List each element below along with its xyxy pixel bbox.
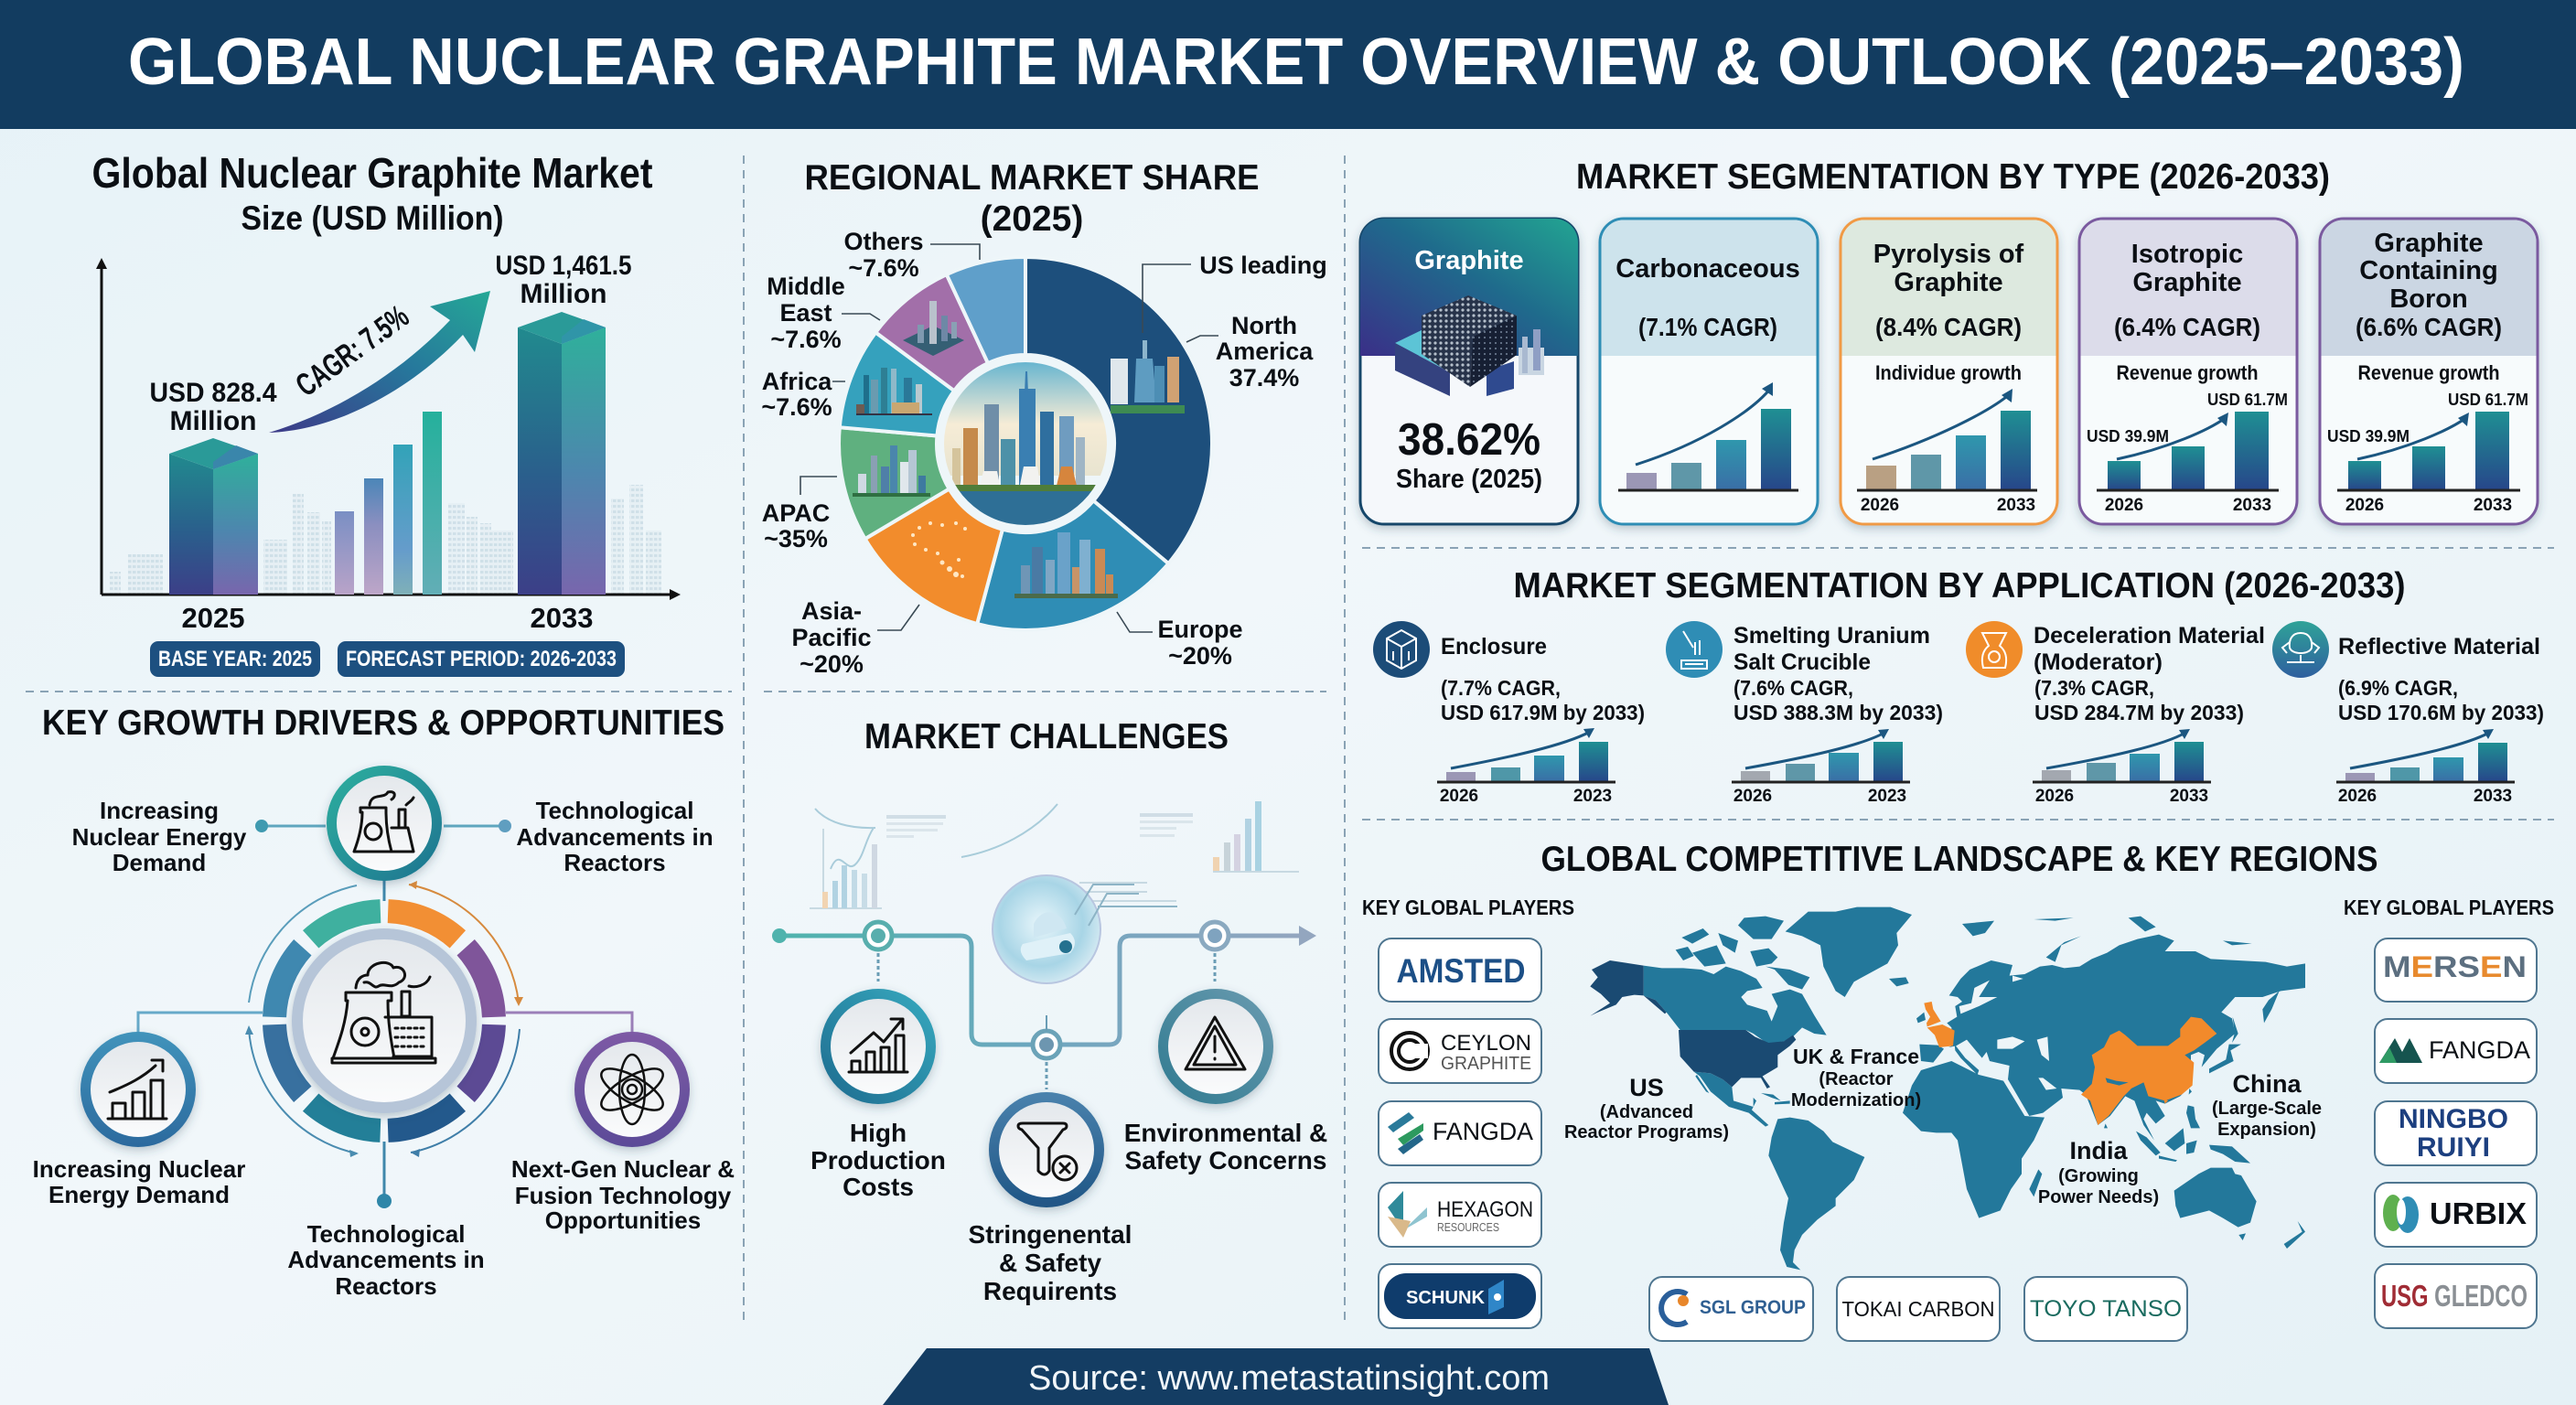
logo: Fangda left	[1379, 1101, 1541, 1165]
card: Graphite Containing Boron: USD 61.7M	[2448, 391, 2528, 409]
card: Graphite Containing Boron: USD 39.9M	[2327, 427, 2410, 445]
label: stringent requirements: Stringenental	[969, 1220, 1132, 1249]
label: bottom driver: Reactors	[335, 1272, 437, 1300]
label Asia-Pacific: ~20%	[800, 650, 864, 678]
item: Enclosure: Enclosure	[1441, 634, 1547, 660]
heading: by type: MARKET SEGMENTATION BY TYPE (2026-2033)	[1576, 157, 2330, 197]
label: bottom driver: Technological	[307, 1220, 465, 1248]
card: Graphite Containing Boron: Graphite	[2374, 229, 2484, 258]
label: high production costs: High	[850, 1119, 907, 1147]
logo: SGL Group: SGL GROUP	[1700, 1297, 1806, 1318]
card: Isotropic Graphite: 2033	[2233, 496, 2271, 515]
item: Smelting Uranium Salt Crucible: Salt Crucible	[1733, 649, 1871, 675]
label Middle East: East	[779, 299, 832, 327]
label: top-right driver: Advancements in	[516, 823, 714, 851]
label: high production costs: Production	[810, 1146, 946, 1174]
card: Pyrolysis of Graphite	[1841, 219, 2057, 524]
item: Smelting Uranium Salt Crucible: 2023	[1868, 787, 1906, 806]
year 2033: 2033	[531, 602, 593, 634]
subheading: size unit: Size (USD Million)	[242, 199, 503, 237]
challenge medallion: environmental safety	[1158, 989, 1273, 1104]
faint skyline background	[110, 485, 661, 595]
label: top-left driver: Increasing	[100, 797, 219, 824]
card: Graphite Containing Boron: 2026	[2345, 496, 2384, 515]
center reactor medallion	[292, 928, 477, 1113]
panel: key growth drivers	[33, 703, 735, 1300]
item: Deceleration Material	[1966, 621, 2265, 806]
label: top-right driver: Reactors	[564, 849, 666, 876]
item: Enclosure: USD 617.9M by 2033)	[1441, 701, 1645, 724]
center skyline illustration	[944, 362, 1107, 525]
label: high production costs: Costs	[843, 1173, 914, 1201]
source banner	[883, 1348, 1669, 1405]
city in North America slice	[1111, 340, 1185, 413]
city in Middle East slice	[903, 301, 964, 356]
logo: Toyo Tanso: TOYO TANSO	[2030, 1296, 2182, 1322]
value 2033 unit: Million	[521, 279, 606, 309]
card: Graphite: Share (2025)	[1396, 465, 1542, 494]
driver medallion: top	[327, 766, 442, 881]
city in Africa slice	[856, 368, 932, 415]
map label: India: (Growing	[2058, 1166, 2139, 1186]
logo: Fangda right	[2375, 1019, 2537, 1083]
forecast period pill: FORECAST PERIOD: 2026-2033	[346, 647, 617, 671]
label Others: Others	[843, 228, 924, 255]
item: Reflective Material: (6.9% CAGR,	[2338, 676, 2458, 700]
item: Enclosure: 2026	[1440, 787, 1478, 806]
label Middle East: Middle	[767, 273, 845, 300]
label Europe: ~20%	[1168, 642, 1232, 670]
label: top-left driver: Nuclear Energy	[72, 823, 247, 851]
value 2025	[150, 378, 277, 436]
city in Europe slice	[1014, 532, 1118, 598]
logo: Schunk	[1379, 1264, 1541, 1328]
card: Graphite Containing Boron: (6.6% CAGR)	[2356, 313, 2502, 341]
card: Graphite Containing Boron: Containing	[2359, 256, 2498, 285]
label: stringent requirements: & Safety	[999, 1249, 1101, 1277]
card: Isotropic Graphite: USD 61.7M	[2207, 391, 2288, 409]
card: Graphite Containing Boron	[2320, 219, 2538, 524]
logo: SGL Group	[1649, 1277, 1813, 1341]
logo: Mersen	[2375, 938, 2537, 1002]
item: Reflective Material: 2033	[2474, 787, 2512, 806]
label: left driver: Increasing Nuclear	[33, 1155, 245, 1183]
map label: India: India	[2069, 1137, 2128, 1164]
label Africa: ~7.6%	[761, 393, 832, 421]
logo: USG Gledco: USG GLEDCO	[2381, 1279, 2528, 1313]
label Africa: Africa	[762, 368, 832, 395]
label: right opportunity: Next-Gen Nuclear &	[511, 1155, 735, 1183]
challenge medallion: production costs	[821, 989, 936, 1104]
base year pill: BASE YEAR: 2025	[158, 647, 312, 671]
card: Pyrolysis of Graphite: 2033	[1997, 496, 2035, 515]
item: Smelting Uranium Salt Crucible: (7.6% CAGR,	[1733, 676, 1853, 700]
label: left driver: Energy Demand	[48, 1181, 230, 1208]
map label: China: China	[2232, 1070, 2302, 1098]
bar 2025	[169, 438, 258, 595]
item: Smelting Uranium Salt Crucible: USD 388.3M by 2033)	[1733, 701, 1943, 724]
header banner: GLOBAL NUCLEAR GRAPHITE MARKET OVERVIEW & OUTLOOK (2025–2033)	[128, 26, 2464, 99]
heading: challenges: MARKET CHALLENGES	[864, 717, 1229, 756]
label: right opportunity: Opportunities	[545, 1207, 701, 1234]
world map	[1590, 907, 2305, 1270]
label: stringent requirements: Requirents	[983, 1277, 1117, 1305]
item: Reflective Material: 2026	[2338, 787, 2377, 806]
value 2025: Million	[170, 406, 256, 436]
driver medallion: right	[574, 1032, 690, 1147]
city in APAC slice	[853, 445, 930, 497]
item: Deceleration Material: Deceleration Material	[2034, 623, 2265, 649]
logo: Schunk: SCHUNK	[1406, 1288, 1486, 1308]
item: Deceleration Material: 2033	[2170, 787, 2208, 806]
item: Enclosure	[1373, 621, 1645, 806]
donut chart	[839, 257, 1212, 630]
item: Deceleration Material: (7.3% CAGR,	[2034, 676, 2154, 700]
map label: US: (Advanced	[1600, 1102, 1693, 1122]
card: Isotropic Graphite: USD 39.9M	[2087, 427, 2169, 445]
card: Carbonaceous: (7.1% CAGR)	[1638, 313, 1777, 341]
logo: Ceylon Graphite: CEYLON	[1441, 1031, 1531, 1056]
map label: US: US	[1629, 1074, 1664, 1101]
card: Pyrolysis of Graphite: Individue growth	[1875, 361, 2022, 384]
header banner	[0, 0, 2576, 129]
chart axes	[96, 258, 681, 600]
map label: UK and France: (Reactor	[1819, 1069, 1894, 1089]
panel: competitive landscape	[1362, 840, 2554, 1341]
label: bottom driver: Advancements in	[287, 1246, 485, 1273]
map label: China: (Large-Scale	[2212, 1099, 2322, 1119]
card: Isotropic Graphite: 2026	[2105, 496, 2143, 515]
world dots in Asia-Pacific slice	[911, 521, 967, 578]
item: Reflective Material	[2272, 621, 2544, 806]
label APAC: APAC	[762, 499, 830, 527]
item: Deceleration Material: (Moderator)	[2034, 649, 2163, 675]
item: Smelting Uranium Salt Crucible: 2026	[1733, 787, 1772, 806]
card: Carbonaceous	[1600, 219, 1818, 524]
logo: Tokai Carbon	[1837, 1277, 2000, 1341]
logo: Ningbo Ruiyi: RUIYI	[2417, 1132, 2490, 1163]
logo: Hexagon Resources: HEXAGON	[1437, 1197, 1533, 1222]
logo: Fangda right: FANGDA	[2429, 1036, 2530, 1064]
logo: Ceylon Graphite	[1379, 1019, 1541, 1083]
card: Graphite Containing Boron: Revenue growth	[2358, 361, 2499, 384]
logo: Ningbo Ruiyi	[2375, 1101, 2537, 1165]
logo: Fangda left: FANGDA	[1433, 1118, 1533, 1145]
map label: UK and France: Modernization)	[1791, 1090, 1921, 1110]
faint analytics background	[810, 801, 1299, 908]
CAGR arrow	[269, 291, 490, 433]
heading year: (2025)	[981, 199, 1083, 239]
label Asia-Pacific: Asia-	[801, 597, 862, 625]
label: top-right driver: Technological	[536, 797, 693, 824]
card: Pyrolysis of Graphite: (8.4% CAGR)	[1875, 313, 2022, 341]
label Others: ~7.6%	[848, 254, 919, 282]
heading: competitive landscape: GLOBAL COMPETITIVE LANDSCAPE & KEY REGIONS	[1540, 840, 2378, 879]
intermediate bars	[335, 412, 442, 595]
value 2033: USD 1,461.5	[496, 251, 631, 281]
map label: US: Reactor Programs)	[1564, 1122, 1729, 1142]
logo: Toyo Tanso	[2024, 1277, 2187, 1341]
logo: Amsted: AMSTED	[1396, 952, 1526, 990]
item: Deceleration Material: 2026	[2035, 787, 2074, 806]
item: Enclosure: (7.7% CAGR,	[1441, 676, 1561, 700]
label US leading: US leading	[1199, 252, 1327, 279]
heading: market size: Global Nuclear Graphite Market	[91, 149, 653, 197]
panel: market size	[91, 149, 681, 677]
card: Pyrolysis of Graphite: Graphite	[1894, 268, 2003, 297]
heading: growth drivers: KEY GROWTH DRIVERS & OPPORTUNITIES	[42, 703, 724, 743]
driver medallion: left	[80, 1032, 196, 1147]
item: Smelting Uranium Salt Crucible	[1666, 621, 1943, 806]
label: top-left driver: Demand	[113, 849, 206, 876]
label: key global players left: KEY GLOBAL PLAYERS	[1362, 896, 1574, 919]
label Middle East: ~7.6%	[770, 326, 842, 353]
bar 2033	[518, 312, 606, 595]
value 2025: USD 828.4	[150, 378, 277, 408]
logo: Hexagon Resources: RESOURCES	[1437, 1220, 1499, 1234]
logo: USG Gledco	[2375, 1264, 2537, 1328]
panel: segmentation by application	[1373, 566, 2544, 806]
connector dots	[255, 820, 511, 1208]
panel: regional market share	[761, 158, 1327, 678]
pipeline start and arrowhead	[772, 926, 1316, 946]
logo: Amsted	[1379, 938, 1541, 1002]
card: Graphite Containing Boron: Boron	[2389, 284, 2468, 314]
logo: Urbix	[2375, 1183, 2537, 1247]
logo: Tokai Carbon: TOKAI CARBON	[1842, 1297, 1994, 1321]
card: Pyrolysis of Graphite: 2026	[1861, 496, 1899, 515]
glass sphere illustration	[993, 875, 1177, 983]
process pipeline	[779, 936, 1299, 1045]
map label: China: Expansion)	[2217, 1120, 2316, 1140]
label North America: North	[1231, 312, 1297, 339]
card: Carbonaceous: Carbonaceous	[1615, 254, 1800, 284]
map label: UK and France: UK & France	[1793, 1045, 1919, 1068]
card: Graphite: 38.62%	[1398, 415, 1540, 465]
item: Enclosure: 2023	[1573, 787, 1612, 806]
logo: Mersen: MERSEN	[2383, 950, 2527, 983]
label APAC: ~35%	[764, 525, 828, 552]
item: Reflective Material: USD 170.6M by 2033)	[2338, 701, 2544, 724]
map label: India: Power Needs)	[2038, 1187, 2159, 1207]
segmented ring	[230, 866, 539, 1175]
label Asia-Pacific: Pacific	[791, 624, 872, 651]
connectors	[138, 826, 632, 1201]
heading: by application: MARKET SEGMENTATION BY APPLICATION (2026-2033)	[1513, 566, 2406, 606]
leader lines	[800, 244, 1218, 632]
logo: Hexagon Resources	[1379, 1183, 1541, 1247]
base year pill	[150, 641, 320, 677]
CAGR label: CAGR: 7.5%	[289, 298, 415, 403]
logo: Ningbo Ruiyi: NINGBO	[2399, 1104, 2508, 1134]
item: Reflective Material: Reflective Material	[2338, 634, 2540, 660]
challenge medallion: stringent requirements	[989, 1092, 1104, 1207]
item: Smelting Uranium Salt Crucible: Smelting Uranium	[1733, 623, 1930, 649]
year 2025: 2025	[182, 602, 244, 634]
forecast period pill	[338, 641, 625, 677]
card: Graphite	[1360, 219, 1578, 524]
label: right opportunity: Fusion Technology	[515, 1182, 732, 1209]
source banner: Source: www.metastatinsight.com	[1028, 1359, 1550, 1398]
card: Isotropic Graphite: Revenue growth	[2117, 361, 2258, 384]
card: Pyrolysis of Graphite: Pyrolysis of	[1873, 240, 2023, 269]
card: Isotropic Graphite	[2079, 219, 2297, 524]
item: Deceleration Material: USD 284.7M by 2033)	[2034, 701, 2244, 724]
label: environmental concerns: Safety Concerns	[1125, 1146, 1326, 1174]
card: Graphite: Graphite	[1414, 246, 1524, 275]
card: Graphite Containing Boron: 2033	[2474, 496, 2512, 515]
panel: market challenges	[772, 717, 1327, 1305]
label Europe: Europe	[1157, 616, 1243, 643]
card: Isotropic Graphite: Graphite	[2132, 268, 2242, 297]
label North America: 37.4%	[1229, 364, 1299, 391]
cycle arrows	[245, 881, 523, 1157]
heading: regional share: REGIONAL MARKET SHARE	[805, 158, 1259, 198]
logo: Ceylon Graphite: GRAPHITE	[1441, 1054, 1531, 1074]
logo: Urbix: URBIX	[2430, 1196, 2527, 1230]
pipeline nodes	[864, 922, 1229, 1089]
panel: segmentation by type	[1360, 157, 2538, 524]
card: Isotropic Graphite: (6.4% CAGR)	[2114, 313, 2260, 341]
card: Isotropic Graphite: Isotropic	[2131, 240, 2243, 269]
label North America: America	[1216, 338, 1314, 365]
label: environmental concerns: Environmental &	[1124, 1119, 1327, 1147]
